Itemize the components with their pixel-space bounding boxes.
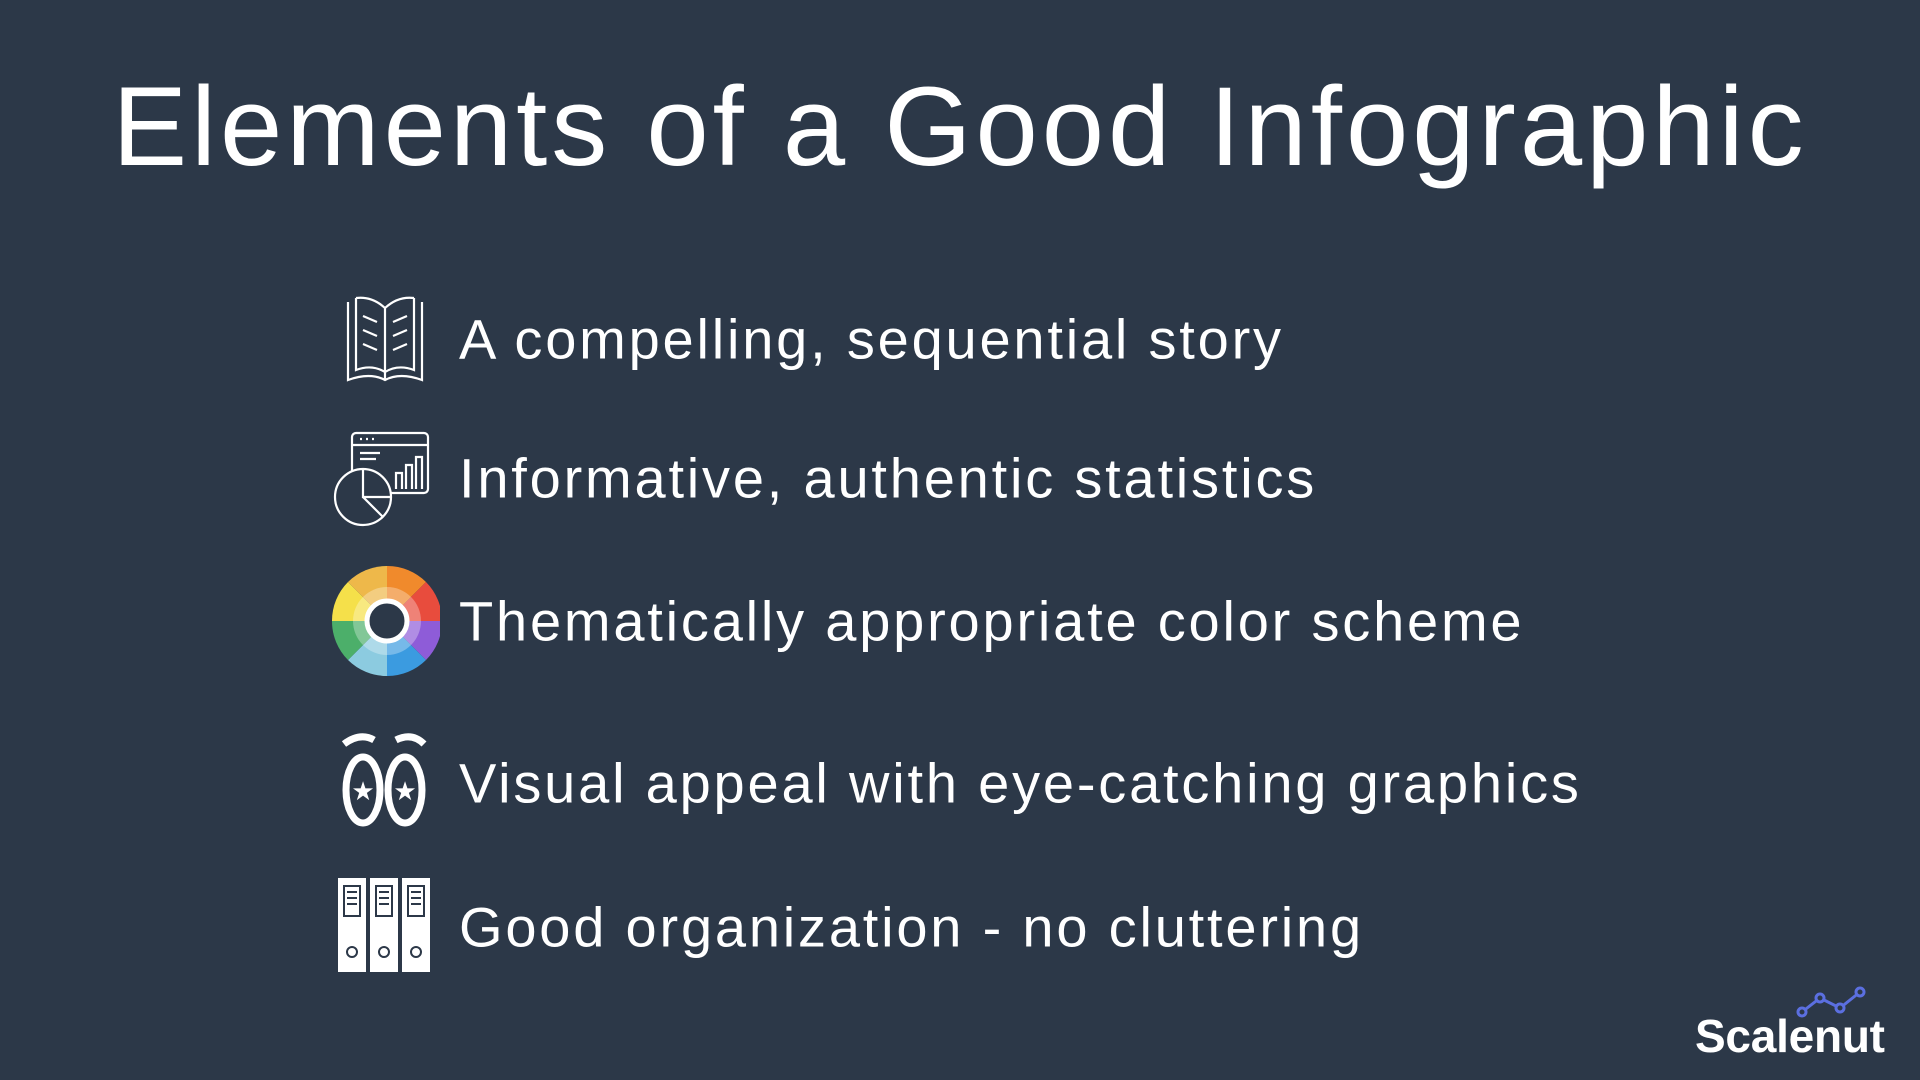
text: Visual appeal with eye-catching graphics <box>459 752 1582 814</box>
text: A compelling, sequential story <box>459 308 1284 370</box>
text: Informative, authentic statistics <box>459 446 1317 510</box>
icon: binders <box>338 878 430 972</box>
title: Elements of a Good Infographic <box>112 64 1808 189</box>
icon: open book <box>346 296 424 382</box>
text: Good organization - no cluttering <box>459 896 1364 958</box>
icon: eyes: ★ <box>351 776 375 806</box>
item: color scheme <box>332 566 1524 676</box>
item: organization <box>338 878 1364 972</box>
item: statistics <box>334 432 1317 526</box>
item: story <box>346 296 1284 382</box>
text: Thematically appropriate color scheme <box>459 590 1524 652</box>
logo: Scalenut <box>1695 986 1885 1060</box>
icon: color wheel <box>332 566 440 676</box>
icon: stats dashboard <box>334 432 430 526</box>
icon: eyes <box>342 733 426 826</box>
icon: eyes: ★ <box>393 776 417 806</box>
item: visual appeal <box>342 733 1582 826</box>
